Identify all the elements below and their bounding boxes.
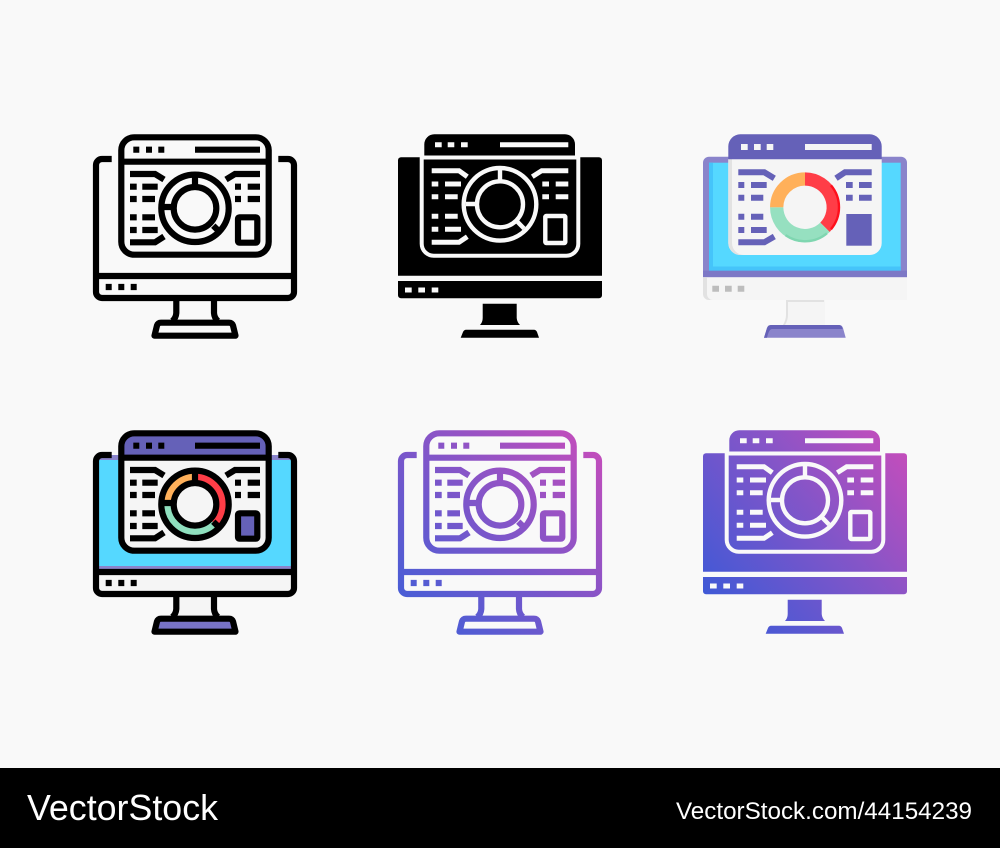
bottom bar fill [96,572,294,594]
donut segment: red [805,179,833,227]
footer logo: VectorStock [27,787,219,828]
flat data rows [738,172,872,242]
base fill [154,619,236,632]
gradient data rows [435,470,565,539]
flat screen [709,163,901,271]
screen fill [98,460,291,566]
flat stand neck shade [783,300,824,325]
flat monitor frame [703,157,907,277]
gradient glyph window details and donut chart [710,441,883,586]
screen frame fill [96,455,294,572]
outline data rows [130,174,260,243]
window body fill [121,433,269,551]
glyph window details and donut chart [405,145,578,290]
outline browser window [121,137,269,255]
flat window shade [728,159,744,255]
donut coloured segments [168,477,222,532]
flat stand base [764,325,846,338]
gradient browser window [426,433,574,551]
flat bottom bar dots [712,286,744,292]
icon: outline monitor dashboard [96,137,294,336]
icon: gradient glyph monitor dashboard [703,430,907,634]
flat monitor bottom bar [703,277,907,300]
widget fill [238,513,257,539]
donut segment: orange [777,179,805,207]
donut segment: green [777,207,825,236]
gradient glyph window header [729,430,880,452]
flat window header controls [741,144,872,150]
flat bottom bar shade [703,277,713,300]
donut rim: dark green [786,233,827,241]
icon: flat colour monitor dashboard [703,134,907,338]
outline donut chart [161,174,229,242]
window header fill [121,433,269,458]
black outlines [96,433,294,632]
flat screen shadow [709,163,901,271]
flat donut chart [777,179,839,241]
flat window header [728,134,882,159]
gradient glyph monitor frame [703,453,907,594]
gradient monitor stand [460,596,540,632]
flat stand neck [783,300,825,325]
glyph monitor stand [461,304,539,338]
gradient monitor frame [401,455,599,594]
glyph window header [424,134,575,156]
flat rectangle widget [846,214,872,246]
footer bar [0,768,1000,848]
neck fill [176,594,214,618]
donut rim: dark red [831,185,839,229]
glyph monitor frame [398,157,602,298]
outline monitor stand [154,300,236,336]
icon: gradient outline monitor dashboard [401,433,599,632]
gradient glyph stand [766,600,844,634]
footer image id: VectorStock.com/44154239 [676,798,972,825]
icon: filled outline monitor dashboard [96,433,294,632]
icon: glyph monitor dashboard [398,134,602,338]
flat stand base top strip [764,325,842,338]
flat window body [728,159,882,255]
gradient donut chart [466,470,534,538]
outline monitor frame [96,159,294,298]
flat screen bottom bezel [703,271,907,277]
